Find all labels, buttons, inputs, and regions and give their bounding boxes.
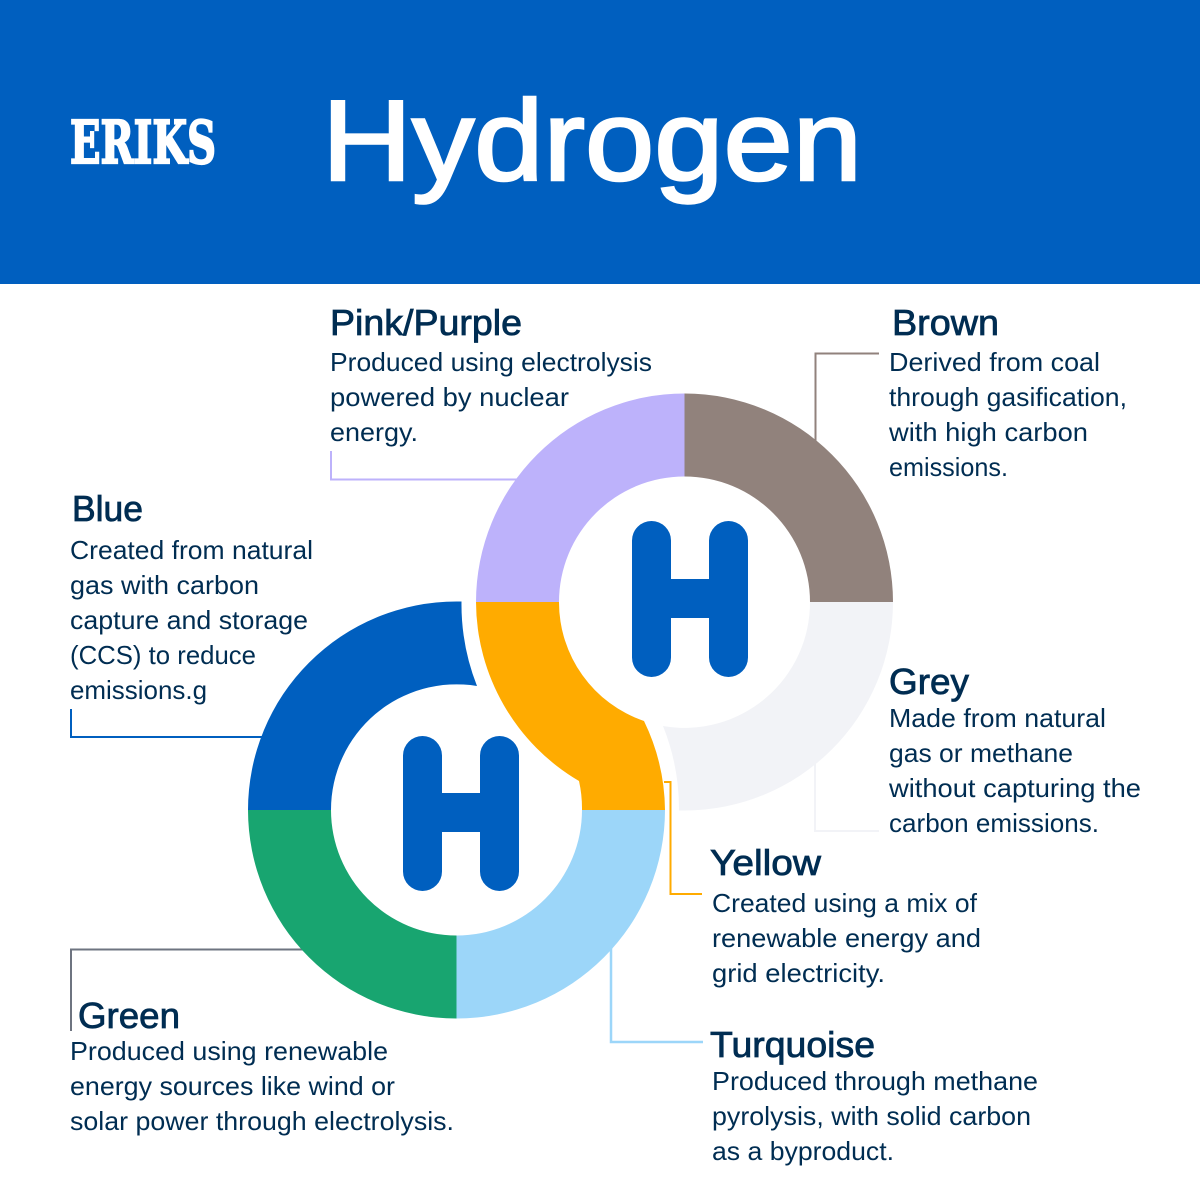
text block: Grey: Made from natural <box>889 703 1106 733</box>
connector: grey <box>815 760 879 831</box>
text block: Brown: Brown <box>892 302 999 343</box>
text block: Brown <box>888 302 1127 482</box>
connector: turquoise <box>611 945 703 1042</box>
connector: blue <box>71 709 265 737</box>
text block: Green: Green <box>78 995 180 1036</box>
text block: Green: solar power through electrolysis. <box>70 1106 454 1136</box>
text block: Brown: Derived from coal <box>889 347 1100 377</box>
text block: Pink/Purple: Pink/Purple <box>330 302 522 343</box>
text block: Yellow: Yellow <box>710 842 822 883</box>
text block: Blue <box>70 488 313 705</box>
text block: Green: energy sources like wind or <box>70 1071 395 1101</box>
text block: Grey <box>888 661 1141 838</box>
connector: green <box>71 950 305 1031</box>
segment: green <box>248 810 456 1018</box>
logo: ERIKS: ERIKS <box>70 108 216 177</box>
text block: Grey: gas or methane <box>889 738 1073 768</box>
text block: Blue: Blue <box>72 488 143 529</box>
header banner <box>0 0 1200 284</box>
text block: Yellow: Created using a mix of <box>712 888 978 918</box>
text block: Grey: carbon emissions. <box>889 808 1099 838</box>
connector: yellow <box>664 782 702 894</box>
text block: Turquoise: Produced through methane <box>712 1066 1038 1096</box>
text block: Yellow: renewable energy and <box>712 923 981 953</box>
text block: Blue: capture and storage <box>70 605 308 635</box>
text block: Grey: Grey <box>889 661 969 702</box>
text block: Pink/Purple: energy. <box>330 417 418 447</box>
text block: Green: Produced using renewable <box>70 1036 388 1066</box>
segment: yellow <box>476 602 665 810</box>
segment: blue <box>248 602 477 810</box>
title: Hydrogen <box>322 78 862 205</box>
text block: Pink/Purple: Produced using electrolysis <box>330 347 652 377</box>
segment: pink/purple <box>476 394 684 602</box>
text block: Yellow <box>710 842 981 988</box>
icon: letter H upper <box>632 521 748 677</box>
segment: grey <box>663 602 893 810</box>
text block: Blue: gas with carbon <box>70 570 259 600</box>
segment: turquoise <box>456 810 665 1018</box>
connector: brown <box>816 354 879 445</box>
text block: Blue: (CCS) to reduce <box>70 640 256 670</box>
segment: brown <box>684 394 893 602</box>
text block: Turquoise: Turquoise <box>710 1024 875 1065</box>
connector: pink/purple <box>331 451 520 480</box>
text block: Brown: through gasification, <box>889 382 1127 412</box>
text block: Brown: with high carbon <box>888 417 1088 447</box>
ring: lower hydrogen ring <box>248 602 665 1018</box>
text block: Pink/Purple: powered by nuclear <box>330 382 569 412</box>
ring: upper hydrogen ring <box>476 394 893 810</box>
text block: Turquoise: as a byproduct. <box>712 1136 894 1166</box>
text block: Blue: Created from natural <box>70 535 313 565</box>
icon: letter H lower <box>403 736 519 891</box>
text block: Grey: without capturing the <box>888 773 1141 803</box>
text block: Blue: emissions.g <box>70 675 207 705</box>
text block: Green <box>70 995 454 1136</box>
text block: Brown: emissions. <box>889 452 1008 482</box>
text block: Turquoise <box>710 1024 1038 1166</box>
text block: Turquoise: pyrolysis, with solid carbon <box>712 1101 1031 1131</box>
text block: Pink/Purple <box>330 302 652 447</box>
text block: Yellow: grid electricity. <box>712 958 885 988</box>
